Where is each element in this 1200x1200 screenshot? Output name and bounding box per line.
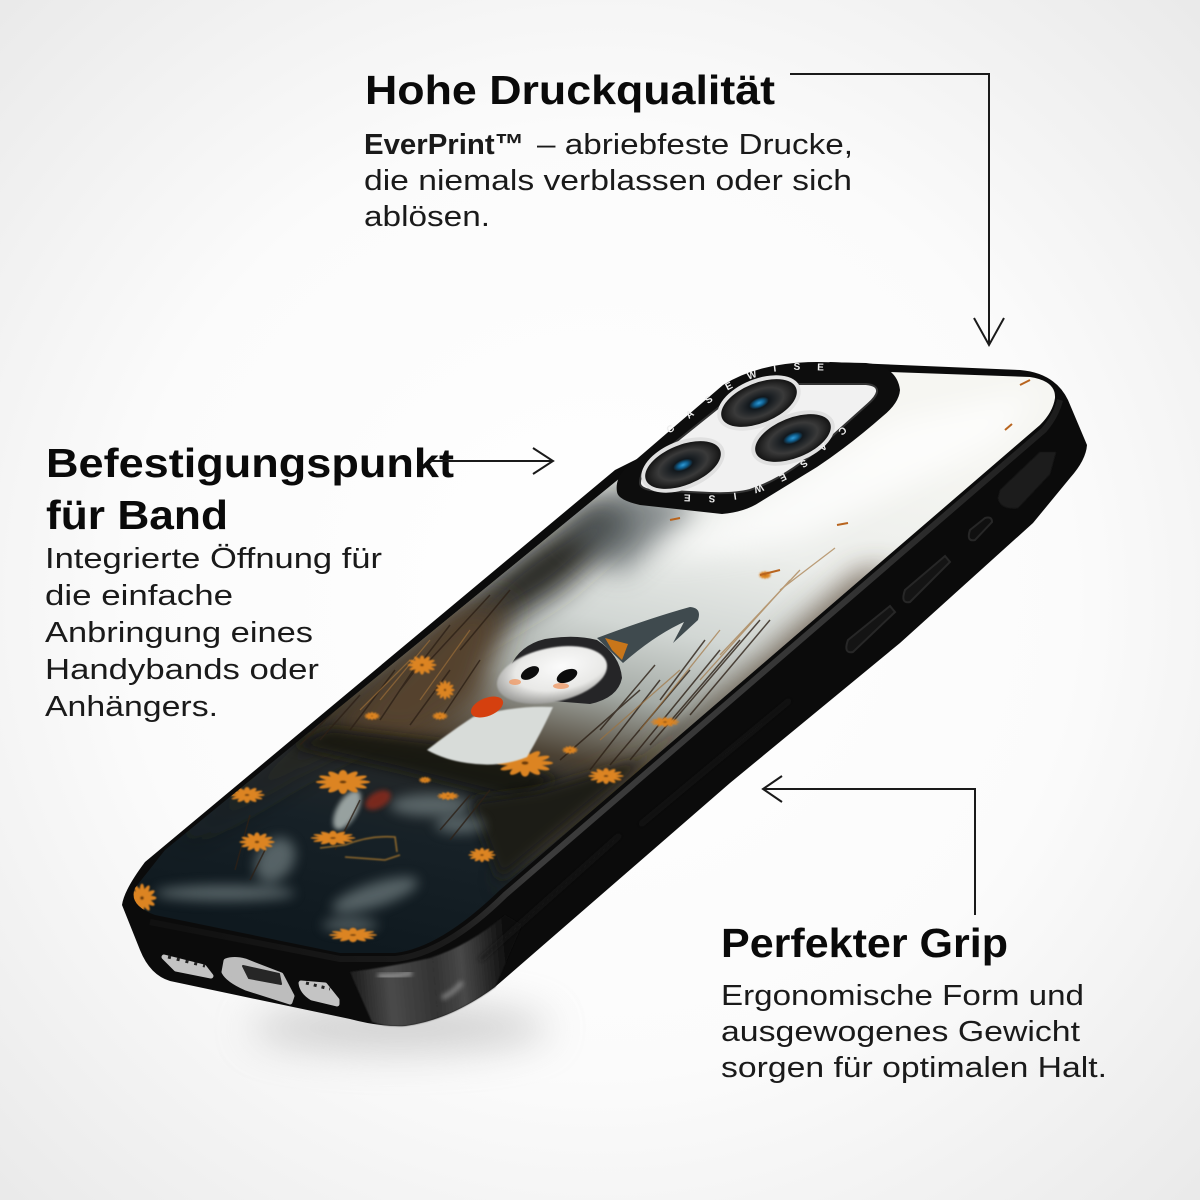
speaker right bbox=[301, 983, 337, 1004]
artwork gradient base bbox=[134, 372, 1056, 953]
brown grass field bbox=[320, 600, 510, 740]
description: Anbringung eines bbox=[45, 617, 313, 649]
casewise ring text top: CASEWISE bbox=[667, 362, 824, 432]
ghost figure bbox=[427, 607, 699, 765]
orange flowers bbox=[128, 571, 771, 942]
description: Integrierte Öffnung für bbox=[45, 543, 382, 575]
brown grass along edge bbox=[500, 570, 900, 890]
arrow: grip bbox=[763, 776, 975, 915]
description: die einfache bbox=[45, 580, 233, 612]
grass strokes bbox=[235, 590, 770, 880]
eye left bbox=[520, 666, 540, 680]
arrow: print quality bbox=[790, 74, 1004, 345]
water reflections bbox=[155, 794, 485, 931]
dark tree edge bbox=[318, 484, 646, 727]
side grip shadow bbox=[480, 700, 790, 960]
speaker left bbox=[164, 957, 211, 976]
orange nose bbox=[470, 696, 504, 718]
glossy corner highlight bbox=[350, 915, 522, 1026]
side button: small bbox=[969, 518, 992, 540]
callout: print quality bbox=[364, 67, 853, 233]
horizon dark band bbox=[290, 728, 560, 800]
island window bbox=[640, 384, 877, 493]
golden tangle bbox=[320, 837, 400, 860]
wizard hat cone bbox=[597, 607, 699, 663]
side button: action bbox=[846, 606, 895, 652]
heading: für Band bbox=[46, 492, 228, 538]
usb port bbox=[224, 960, 292, 1002]
description: Anhängers. bbox=[45, 691, 218, 723]
description: ausgewogenes Gewicht bbox=[721, 1016, 1080, 1048]
camera lens right bbox=[743, 399, 843, 477]
heading: Befestigungspunkt bbox=[46, 440, 454, 486]
phone drop shadow bbox=[250, 1004, 550, 1052]
phone case bbox=[122, 362, 1087, 1028]
camera island bbox=[616, 362, 900, 514]
camera lens top bbox=[709, 364, 809, 442]
arrow: strap attachment bbox=[430, 448, 553, 474]
ghost face bbox=[496, 645, 608, 704]
hat brim bbox=[510, 637, 622, 704]
heading bbox=[46, 440, 454, 538]
description: Ergonomische Form und bbox=[721, 980, 1084, 1012]
callout: grip bbox=[721, 920, 1107, 1084]
heading: Hohe Druckqualität bbox=[365, 67, 775, 113]
screen rim highlight bbox=[150, 400, 1060, 959]
island frame bbox=[617, 362, 900, 514]
bright reflection bbox=[330, 788, 364, 832]
side button: camera control bbox=[998, 452, 1056, 508]
pale sky wash bbox=[692, 427, 971, 547]
ghost body bbox=[427, 707, 553, 765]
side button: volume up bbox=[903, 556, 950, 602]
rust specks bbox=[670, 380, 1030, 575]
description: ablösen. bbox=[364, 201, 490, 233]
description: Handybands oder bbox=[45, 654, 319, 686]
printed artwork bbox=[134, 372, 1056, 953]
case body bbox=[122, 362, 1087, 1026]
callout: strap attachment bbox=[45, 440, 454, 723]
description: die niemals verblassen oder sich bbox=[364, 165, 852, 197]
description bbox=[721, 980, 1107, 1084]
description: – abriebfeste Drucke, bbox=[537, 129, 853, 161]
description bbox=[45, 543, 382, 723]
casewise ring text bottom: CASEWISE bbox=[684, 428, 846, 502]
description bbox=[364, 129, 853, 233]
grey mist band bbox=[560, 480, 700, 575]
camera lens left bbox=[633, 426, 733, 504]
description: sorgen für optimalen Halt. bbox=[721, 1052, 1107, 1084]
red reflection bbox=[363, 788, 393, 812]
description: EverPrint™ bbox=[364, 129, 524, 161]
heading: Perfekter Grip bbox=[721, 920, 1008, 966]
eye right bbox=[556, 668, 578, 684]
